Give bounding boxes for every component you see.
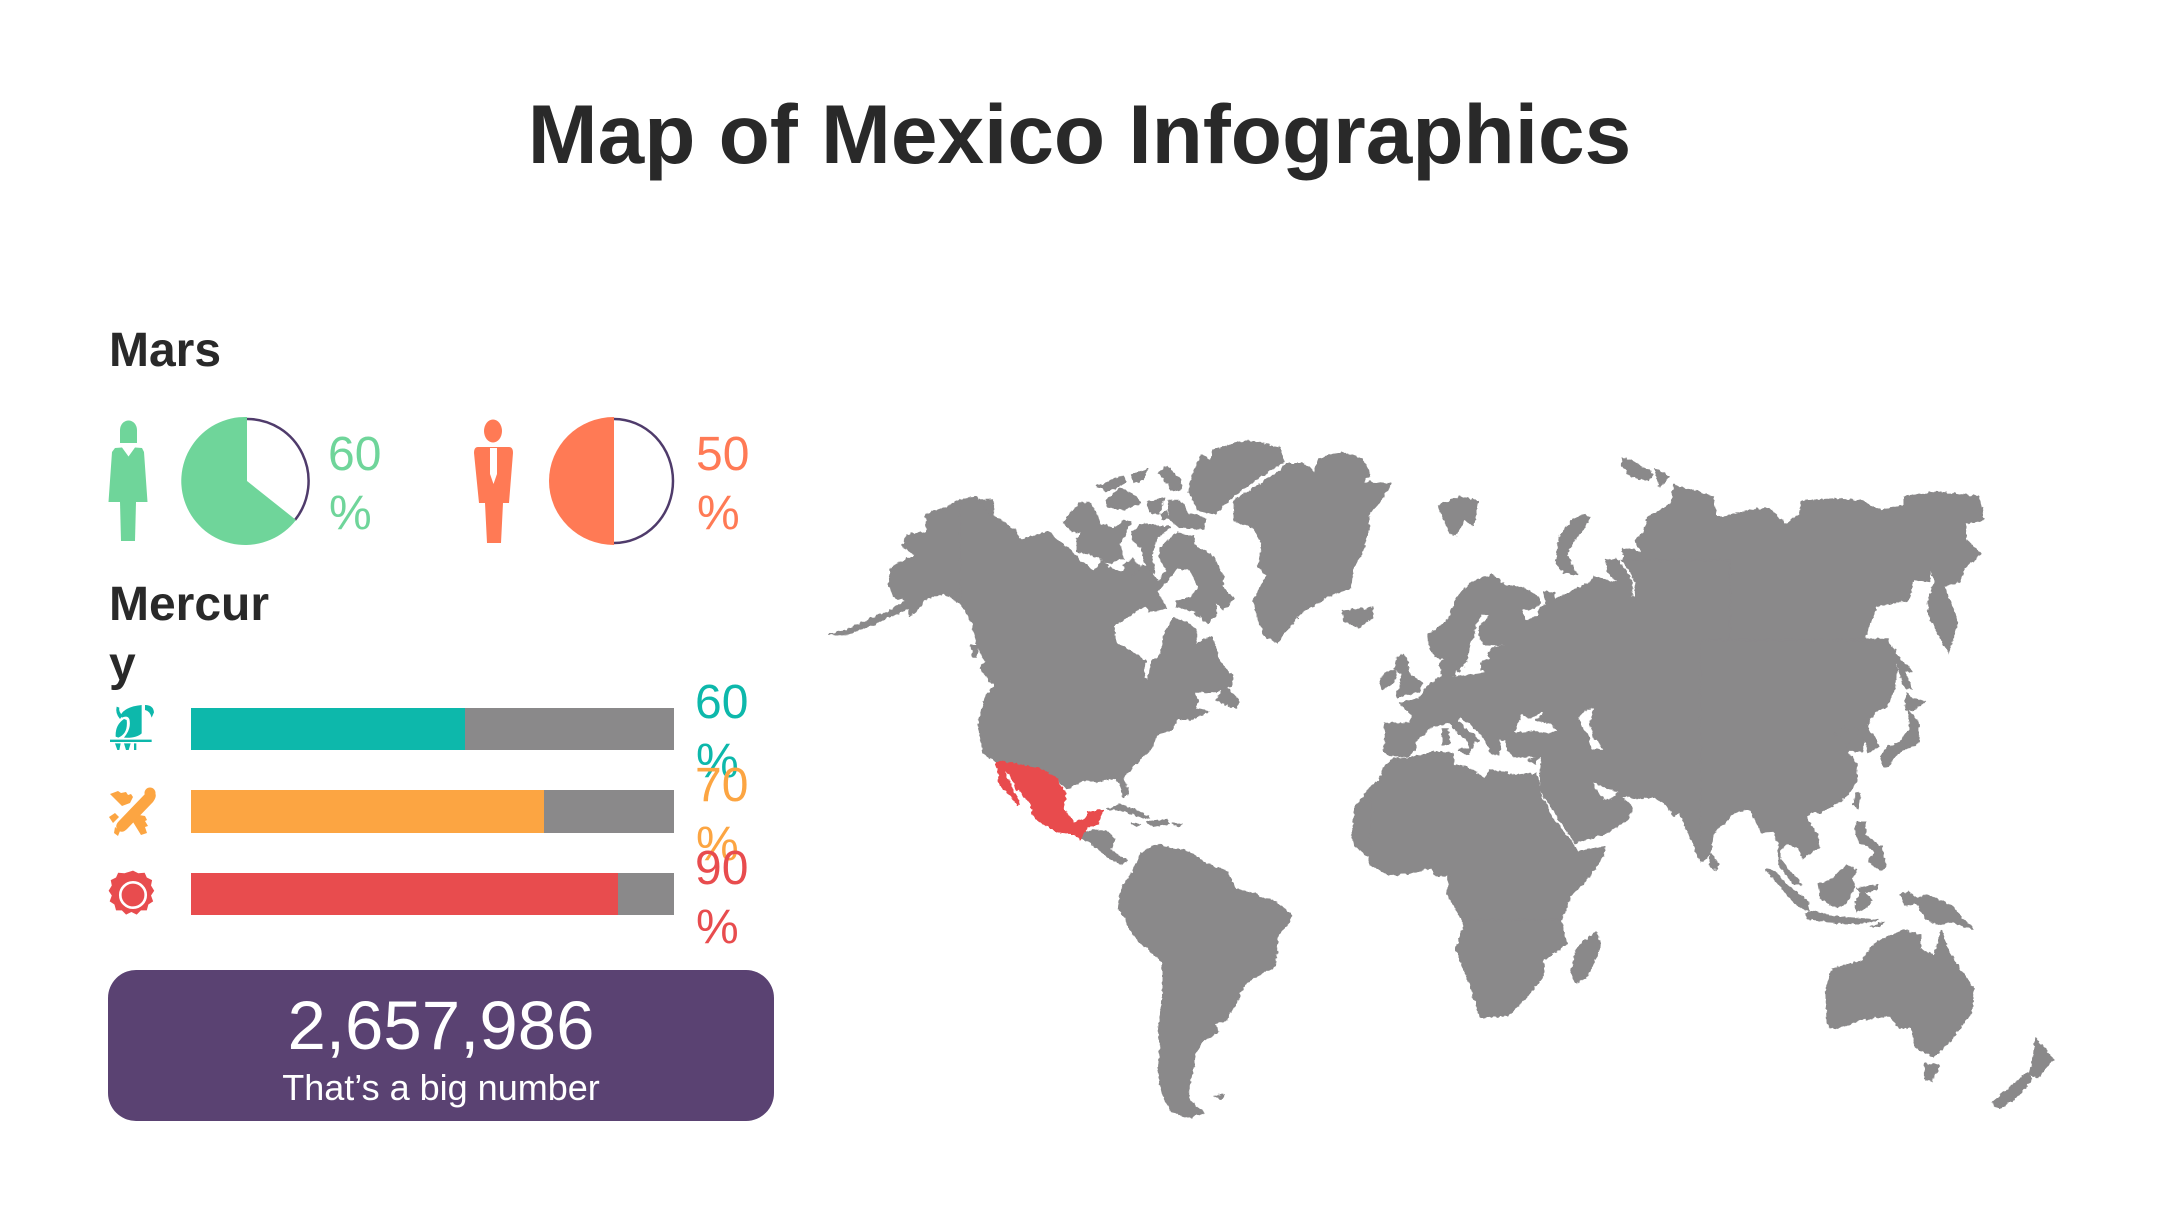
world map — [829, 441, 2053, 1118]
value: 60%: 60 — [328, 428, 381, 481]
value: 60%: % — [329, 487, 372, 540]
map: North America — [960, 497, 1238, 797]
icon: badge — [109, 871, 154, 915]
bar: 60% — [191, 708, 674, 750]
map: East Asia, Southeast Asia and New Guinea — [1700, 640, 1973, 928]
panel: Mars — [108, 324, 749, 545]
value: 90%: % — [696, 901, 739, 954]
value: 90% — [695, 842, 748, 954]
value: 70%: 70 — [695, 759, 748, 812]
icon: man — [474, 420, 513, 543]
callout: big number: 2,657,986 — [288, 987, 594, 1064]
pie chart: 50% — [549, 417, 673, 545]
value: 50%: 50 — [696, 428, 749, 481]
value: 60% — [328, 428, 381, 540]
value: 50% — [696, 428, 749, 540]
panel: Mercury — [109, 578, 748, 954]
value: 70% — [695, 759, 748, 871]
title: Map of Mexico Infographics — [528, 87, 1631, 181]
pie chart: 60% — [181, 417, 309, 545]
callout: big number — [108, 970, 774, 1121]
heading: Mercury — [109, 578, 269, 691]
value: 60%: % — [696, 735, 739, 788]
icon: plane — [109, 788, 156, 836]
callout: big number: That’s a big number — [282, 1067, 600, 1108]
map: Mexico highlighted — [996, 762, 1103, 839]
value: 70%: % — [696, 818, 739, 871]
value: 50%: % — [697, 487, 740, 540]
heading: Mars: Mars — [109, 324, 221, 377]
value: 90%: 90 — [695, 842, 748, 895]
heading: Mercury: Mercur — [109, 578, 269, 631]
map: Siberia, Arctic islands, southern Africa, Australia and New Zealand — [1352, 458, 2053, 1108]
icon: woman — [108, 420, 148, 541]
value: 60%: 60 — [695, 676, 748, 729]
value: 60% — [695, 676, 748, 788]
heading: Mercury: y — [109, 638, 136, 691]
map: Europe, North Africa and Western Asia — [1370, 560, 1730, 920]
bar: 90% — [191, 873, 674, 915]
icon: parrot — [110, 705, 154, 750]
map: Alaska, Arctic, Greenland, Caribbean and South America — [829, 441, 1390, 1118]
bar: 70% — [191, 790, 674, 833]
